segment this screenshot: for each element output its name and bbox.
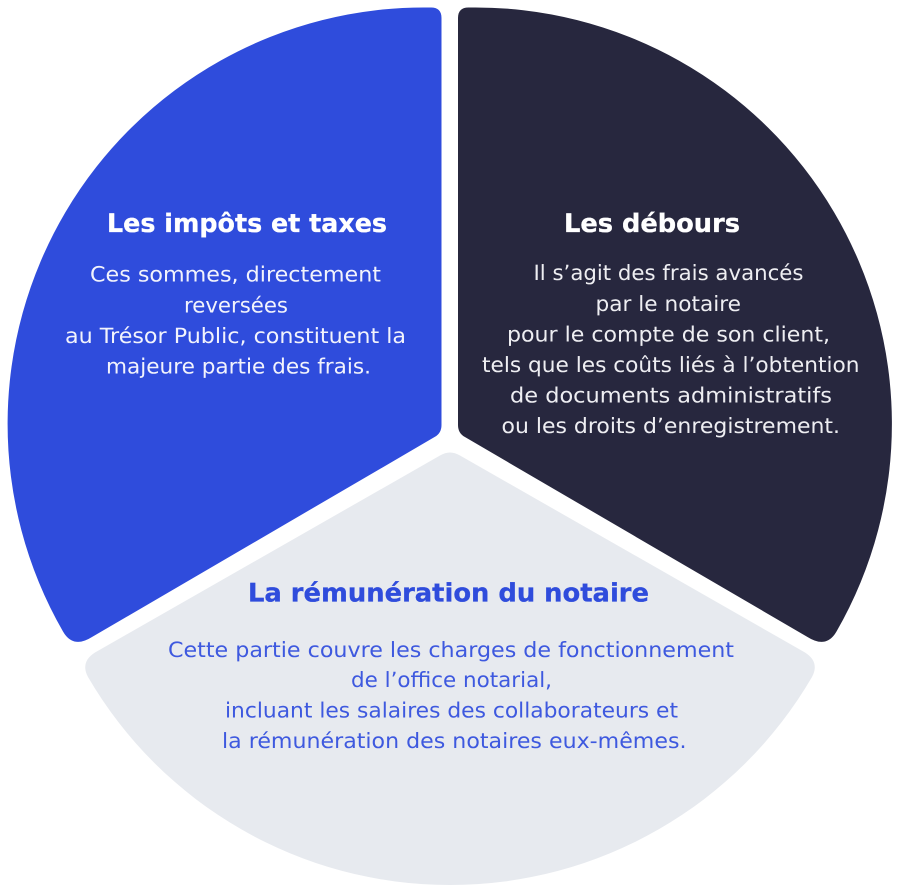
text block: impôts et taxes: reversées bbox=[184, 294, 288, 318]
text block: débours: ou les droits d’enregistrement. bbox=[502, 414, 840, 438]
text block: impôts et taxes bbox=[65, 262, 406, 378]
text block: débours: Il s’agit des frais avancés bbox=[534, 261, 804, 285]
panel: rémunération du notaire bbox=[85, 452, 815, 885]
text block: rémunération du notaire: incluant les salaires des collaborateurs et bbox=[225, 698, 678, 722]
text block: débours: pour le compte de son client, bbox=[507, 322, 830, 346]
heading: rémunération du notaire: La rémunération du notaire bbox=[248, 578, 649, 608]
sector shape: dark navy bbox=[458, 7, 892, 642]
sector shape: blue bbox=[8, 7, 441, 642]
panel: débours bbox=[458, 7, 892, 642]
text block: rémunération du notaire: de l’office notarial, bbox=[351, 668, 552, 692]
text block: débours: par le notaire bbox=[596, 292, 741, 316]
text block: impôts et taxes: au Trésor Public, constituent la bbox=[65, 324, 406, 348]
text block: impôts et taxes: Ces sommes, directement bbox=[90, 262, 381, 286]
heading: impôts et taxes: Les impôts et taxes bbox=[107, 209, 387, 239]
panel: impôts et taxes bbox=[8, 7, 441, 642]
heading: débours: Les débours bbox=[564, 209, 740, 239]
text block: rémunération du notaire: la rémunération des notaires eux-mêmes. bbox=[222, 729, 686, 753]
text block: rémunération du notaire: Cette partie couvre les charges de fonctionnement bbox=[168, 638, 734, 662]
text block: débours bbox=[482, 261, 860, 438]
text block: rémunération du notaire bbox=[168, 638, 734, 753]
sector shape: light grey bbox=[85, 452, 815, 885]
text block: débours: de documents administratifs bbox=[510, 384, 832, 408]
text block: impôts et taxes: majeure partie des frais. bbox=[106, 354, 371, 378]
text block: débours: tels que les coûts liés à l’obtention bbox=[482, 353, 860, 377]
